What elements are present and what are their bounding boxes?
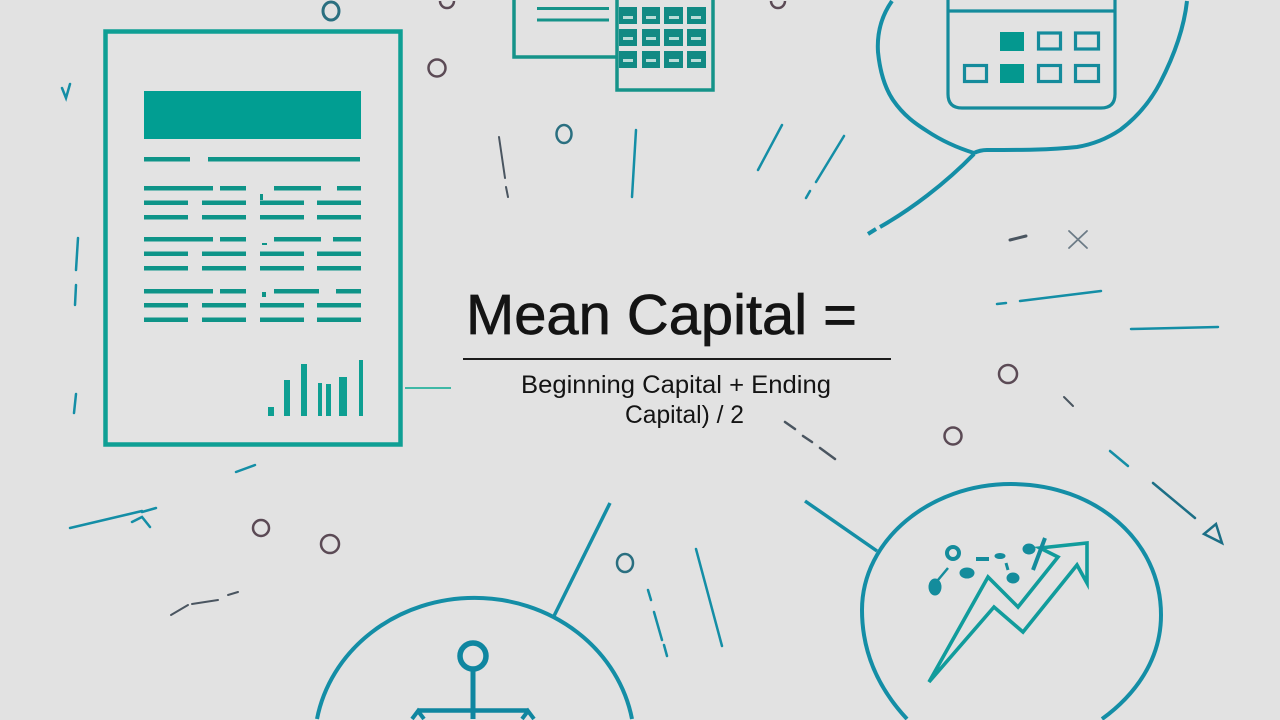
panel: financial statement document xyxy=(106,32,400,444)
document table rows xyxy=(144,186,361,322)
callout: growth arrow circle xyxy=(805,484,1161,719)
bubble outline xyxy=(878,1,1187,153)
title: formula heading: Mean Capital = xyxy=(466,283,857,347)
icon: small cross mark xyxy=(1069,231,1087,248)
circle outline xyxy=(317,598,632,719)
formula divider xyxy=(463,358,891,360)
document frame xyxy=(106,32,400,444)
icon: balance scale xyxy=(412,643,534,719)
decorative dash marks xyxy=(62,84,1222,656)
icon: small triangle mark xyxy=(1204,524,1222,543)
icon: scattered data marks xyxy=(929,538,1045,595)
callout: balance scale circle xyxy=(317,503,632,719)
small document xyxy=(514,0,617,57)
icon: rising zigzag arrow xyxy=(929,543,1087,682)
icon: document and calculator xyxy=(514,0,713,90)
teal dashes xyxy=(62,84,1218,656)
circle outline xyxy=(862,484,1161,719)
teal ring markers xyxy=(323,2,633,572)
circle tail xyxy=(805,501,877,551)
icon: calendar xyxy=(948,0,1115,108)
text: formula denominator: Beginning Capital + Ending xyxy=(521,371,831,399)
ring markers xyxy=(253,1,1017,553)
document subtitle lines xyxy=(144,157,360,162)
text: formula denominator: Capital) / 2 xyxy=(625,401,744,429)
dark dashes xyxy=(171,137,1195,615)
circle tail xyxy=(554,503,610,616)
bubble tail xyxy=(868,154,974,234)
decorative small rings xyxy=(253,1,1017,572)
connector: document to formula xyxy=(405,387,451,389)
text: formula denominator xyxy=(521,371,831,429)
document bar chart xyxy=(268,360,363,416)
document header block xyxy=(144,91,361,139)
callout: calendar speech bubble xyxy=(868,0,1187,234)
calculator xyxy=(617,0,713,90)
